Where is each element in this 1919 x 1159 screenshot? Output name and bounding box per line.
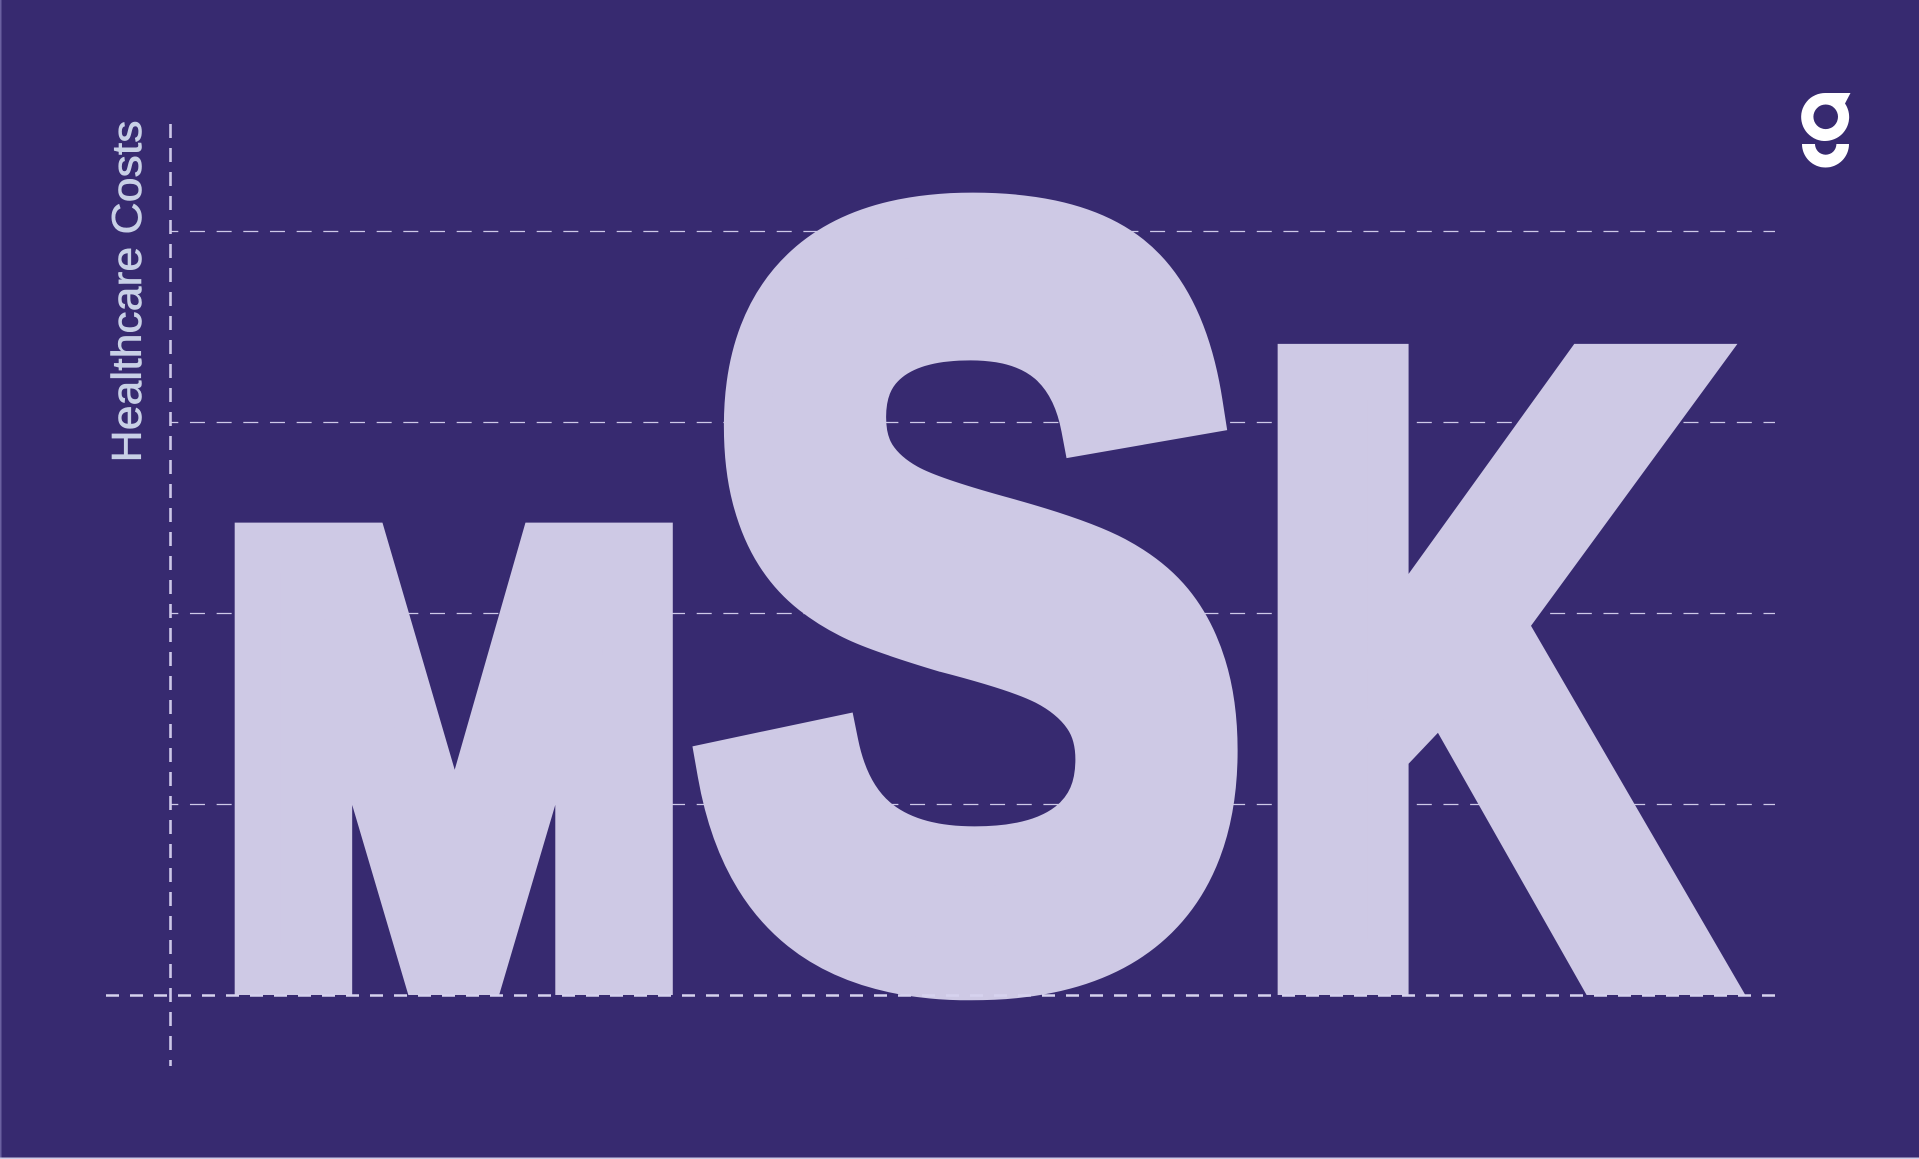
vertical dashed axis [169,124,172,1066]
letter M: M [220,415,687,1100]
baseline dashed axis [106,994,1775,997]
letter S: S [697,4,1246,1159]
label: Healthcare Costs: Healthcare Costs [103,120,150,462]
icon: g logo [1801,93,1850,168]
letter K: K [1256,185,1709,1151]
